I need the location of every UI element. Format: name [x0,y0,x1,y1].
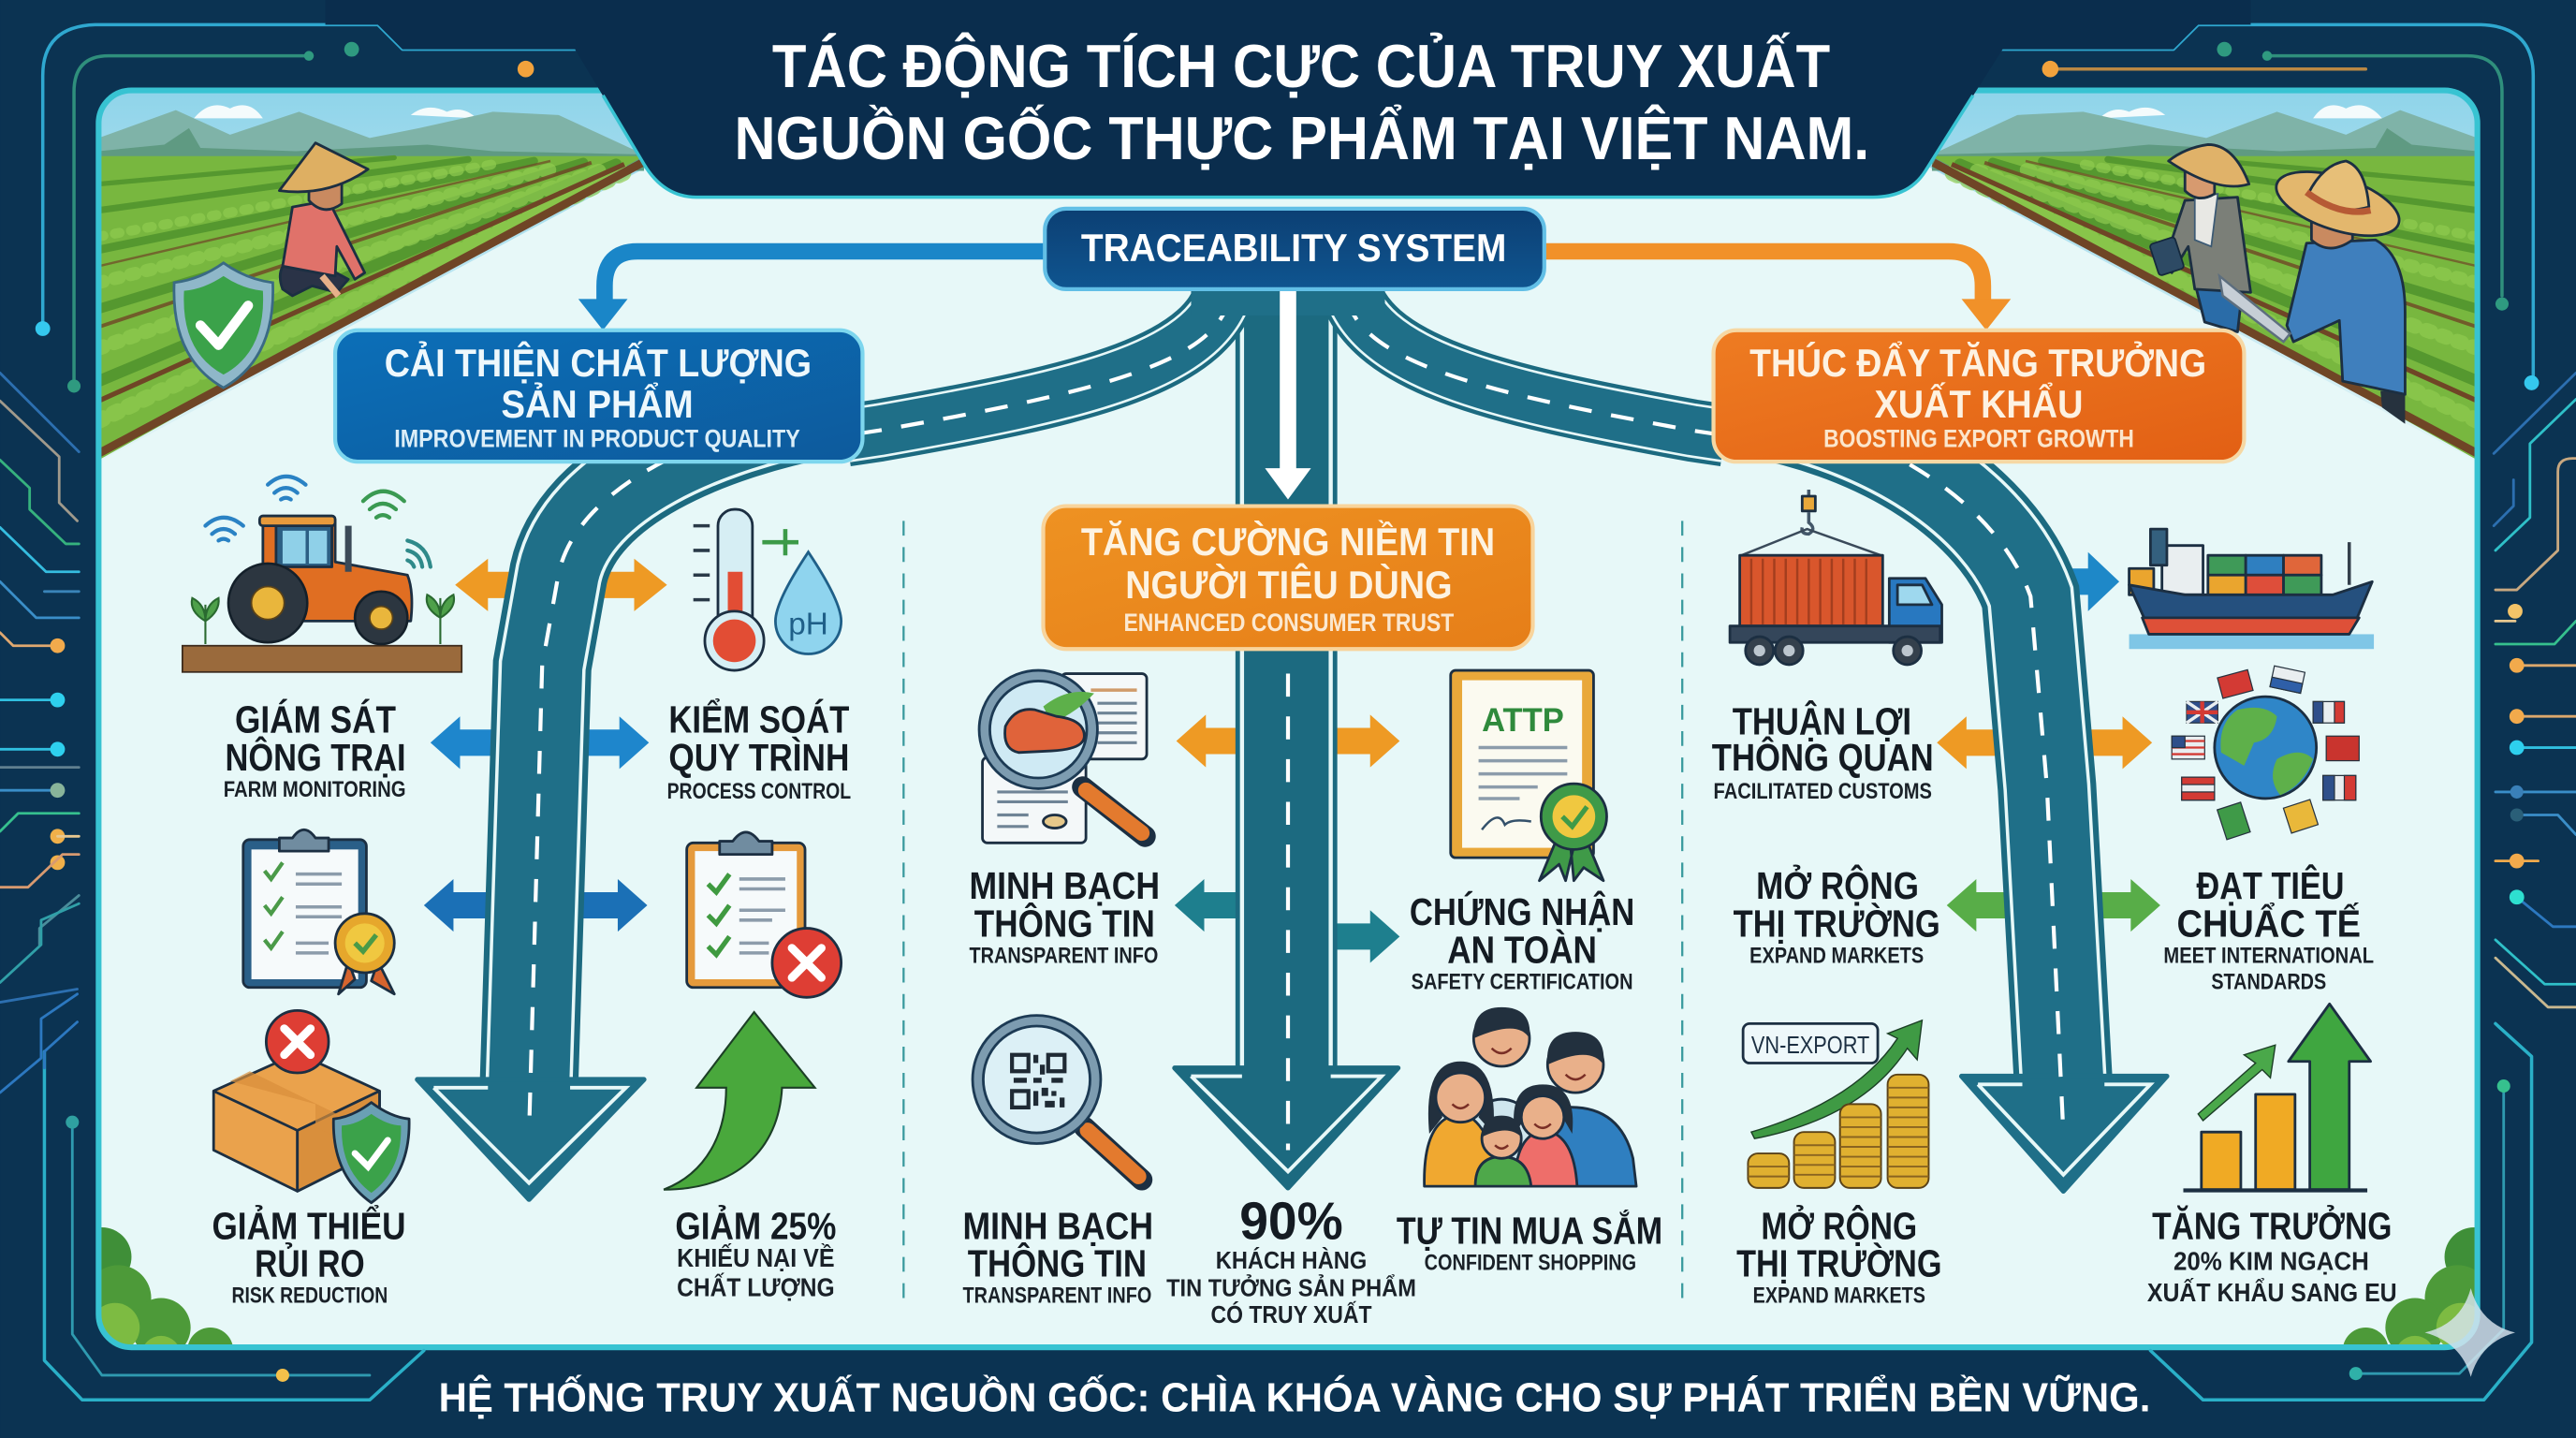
icon: coin stacks with VN-EXPORT tag [1743,1020,1928,1188]
icon: coin stacks with VN-EXPORT tag: VN-EXPORT [1751,1033,1869,1059]
label: process control: QUY TRÌNH [668,736,849,779]
label: transparent info bottom: THÔNG TIN [968,1242,1147,1285]
icon: happy family [1425,1007,1636,1186]
arrow: truck to ship blue [2037,552,2119,611]
arrow: consumer teal right [1314,910,1399,962]
box: traceability system [1045,209,1544,289]
label: transparent info top: THÔNG TIN [974,902,1155,945]
circuit traces: right side [2001,24,2576,1400]
icon: ATTP certificate [1451,670,1606,881]
column: export growth [1712,490,2397,1309]
label: confident shopping: TỰ TIN MUA SẮM [1397,1210,1662,1253]
stat: 90 percent of customers [1166,1191,1416,1328]
box: boosting export growth: XUẤT KHẨU [1875,381,2083,426]
box: improvement in product quality: CẢI THIỆN CHẤT LƯỢNG [385,340,812,385]
label: 25 percent fewer complaints: CHẤT LƯỢNG [677,1273,835,1302]
label: expand markets bottom: EXPAND MARKETS [1753,1284,1925,1309]
label: expand markets bottom: THỊ TRƯỜNG [1736,1242,1942,1285]
label: transparent info bottom: TRANSPARENT INFO [963,1284,1151,1309]
icon: parcel box with cross and shield [213,1010,409,1203]
box: improvement in product quality: IMPROVEMENT IN PRODUCT QUALITY [394,423,800,452]
decoration: bottom bushes [72,1227,2504,1375]
label: facilitated customs: FACILITATED CUSTOMS [1714,780,1932,804]
box: boosting export growth: BOOSTING EXPORT GROWTH [1823,423,2134,452]
arrow: export orange [1937,716,2152,769]
title: TÁC ĐỘNG TÍCH CỰC CỦA TRUY XUẤT [772,32,1830,100]
label: farm monitoring [224,698,406,802]
label: meet international standards: MEET INTERNATIONAL [2163,944,2374,968]
arrow: system to export orange [1538,252,2011,330]
label: 25 percent fewer complaints: GIẢM 25% [675,1204,836,1247]
icon: container ship [2130,529,2374,649]
label: confident shopping: CONFIDENT SHOPPING [1425,1252,1636,1276]
icon: green up arrow [664,1012,815,1190]
icon: globe with flags [2172,666,2359,840]
icon: magnifier over document and meat [979,670,1147,843]
label: transparent info bottom [963,1204,1153,1309]
label: meet international standards: ĐẠT TIÊU [2197,864,2344,907]
label: meet international standards [2163,864,2374,995]
box: enhanced consumer trust: TĂNG CƯỜNG NIỀM TIN [1081,519,1495,564]
label: expand markets top: MỞ RỘNG [1756,864,1919,907]
icon: clipboard with badge [243,829,394,994]
illustration: right farm field [1927,91,2478,462]
banner border [603,95,1973,198]
arrow: centre white [1265,289,1311,500]
roads [417,279,2167,1199]
arrow: consumer teal left [1175,879,1265,932]
fill between road forks [1191,289,1385,315]
label: expand markets top: THỊ TRƯỜNG [1734,902,1940,945]
icon: green shield [174,263,273,388]
box: enhanced consumer trust: ENHANCED CONSUMER TRUST [1123,608,1455,637]
label: facilitated customs: THÔNG QUAN [1712,736,1934,779]
column: product quality [183,477,851,1309]
label: transparent info top [970,864,1160,968]
box: boosting export growth: THÚC ĐẨY TĂNG TRƯỞNG [1749,340,2206,385]
label: growth in EU exports: 20% KIM NGẠCH [2174,1247,2369,1276]
icon: orange clipboard with cross [687,832,842,997]
label: process control: PROCESS CONTROL [667,780,851,804]
label: 25 percent fewer complaints: KHIẾU NẠI VỀ [677,1243,835,1272]
icon: sparkle watermark [2424,1288,2515,1377]
label: safety certification [1410,890,1634,995]
label: facilitated customs: THUẬN LỢI [1733,699,1911,742]
box: traceability system: TRACEABILITY SYSTEM [1081,226,1506,270]
label: 25 percent fewer complaints [675,1204,836,1302]
icon: growth bar chart [2183,1004,2371,1191]
stat: 90 percent of customers: TIN TƯỞNG SẢN PHẨM [1166,1274,1416,1302]
label: growth in EU exports: TĂNG TRƯỞNG [2152,1204,2392,1247]
label: growth in EU exports [2147,1204,2397,1307]
label: risk reduction: GIẢM THIỂU [212,1203,406,1247]
label: facilitated customs [1712,699,1934,804]
title: NGUỒN GỐC THỰC PHẨM TẠI VIỆT NAM. [735,104,1869,172]
label: confident shopping [1397,1210,1662,1276]
label: expand markets bottom: MỞ RỘNG [1761,1204,1917,1247]
label: meet international standards: STANDARDS [2211,971,2326,995]
box: enhanced consumer trust [1044,506,1532,649]
label: risk reduction [212,1203,406,1309]
label: transparent info top: TRANSPARENT INFO [970,944,1158,968]
label: farm monitoring: FARM MONITORING [224,778,406,802]
farmer with laptop [2219,159,2407,424]
label: meet international standards: CHUẨC TẾ [2176,901,2361,945]
arrow: consumer orange [1177,714,1399,768]
label: process control: KIỂM SOÁT [668,697,850,741]
stat: 90 percent of customers: KHÁCH HÀNG [1216,1246,1367,1274]
footer text: HỆ THỐNG TRUY XUẤT NGUỒN GỐC: CHÌA KHÓA VÀNG CHO SỰ PHÁT TRIỂN BỀN VỮNG. [439,1373,2150,1421]
road: left [417,279,1229,1199]
label: expand markets top: EXPAND MARKETS [1749,944,1924,968]
title banner shape [326,0,2250,198]
label: expand markets top [1734,864,1940,968]
stat: 90 percent of customers: CÓ TRUY XUẤT [1211,1300,1372,1328]
label: expand markets bottom [1736,1204,1942,1309]
icon: thermometer and pH drop [694,509,842,670]
circuit traces: left side [0,24,575,1400]
arrow: farm to process orange [455,559,667,611]
illustration: left farm field [98,91,649,462]
arrow: system to quality blue [578,252,1051,330]
label: risk reduction: RISK REDUCTION [232,1284,388,1309]
icon: magnifier with QR code [973,1016,1142,1180]
box: improvement in product quality [335,330,862,462]
divider: right column [1681,521,1683,1306]
divider: left column [902,521,904,1306]
farmer with tablet [2149,144,2250,332]
stat: 90 percent of customers: 90% [1239,1191,1343,1250]
label: process control [667,697,851,804]
small arrows behind roads [424,552,2160,962]
label: farm monitoring: NÔNG TRẠI [225,736,406,779]
label: safety certification: SAFETY CERTIFICATION [1412,971,1633,995]
arrow: monitoring blue [431,716,649,769]
icon: ATTP certificate: ATTP [1482,702,1564,739]
title [735,32,1869,172]
label: safety certification: AN TOÀN [1447,928,1597,971]
box: boosting export growth [1714,330,2244,462]
road: centre [1175,289,1398,1188]
label: farm monitoring: GIÁM SÁT [235,698,396,741]
arrow: export green [1947,879,2160,932]
farmer with conical hat [279,143,368,296]
icon: truck with crane hook [1730,490,1942,665]
box: enhanced consumer trust: NGƯỜI TIÊU DÙNG [1125,562,1453,607]
road: right [1347,279,2167,1191]
label: risk reduction: RỦI RO [255,1242,365,1285]
box: improvement in product quality: SẢN PHẨM [501,381,694,426]
column: consumer trust [963,670,1662,1328]
icon: thermometer and pH drop: pH [788,607,828,641]
label: safety certification: CHỨNG NHẬN [1410,890,1634,933]
icon: tractor with wifi [183,477,461,672]
label: transparent info top: MINH BẠCH [970,864,1160,907]
arrow: quality dark blue [424,879,648,932]
label: transparent info bottom: MINH BẠCH [963,1204,1153,1247]
label: growth in EU exports: XUẤT KHẨU SANG EU [2147,1278,2397,1307]
